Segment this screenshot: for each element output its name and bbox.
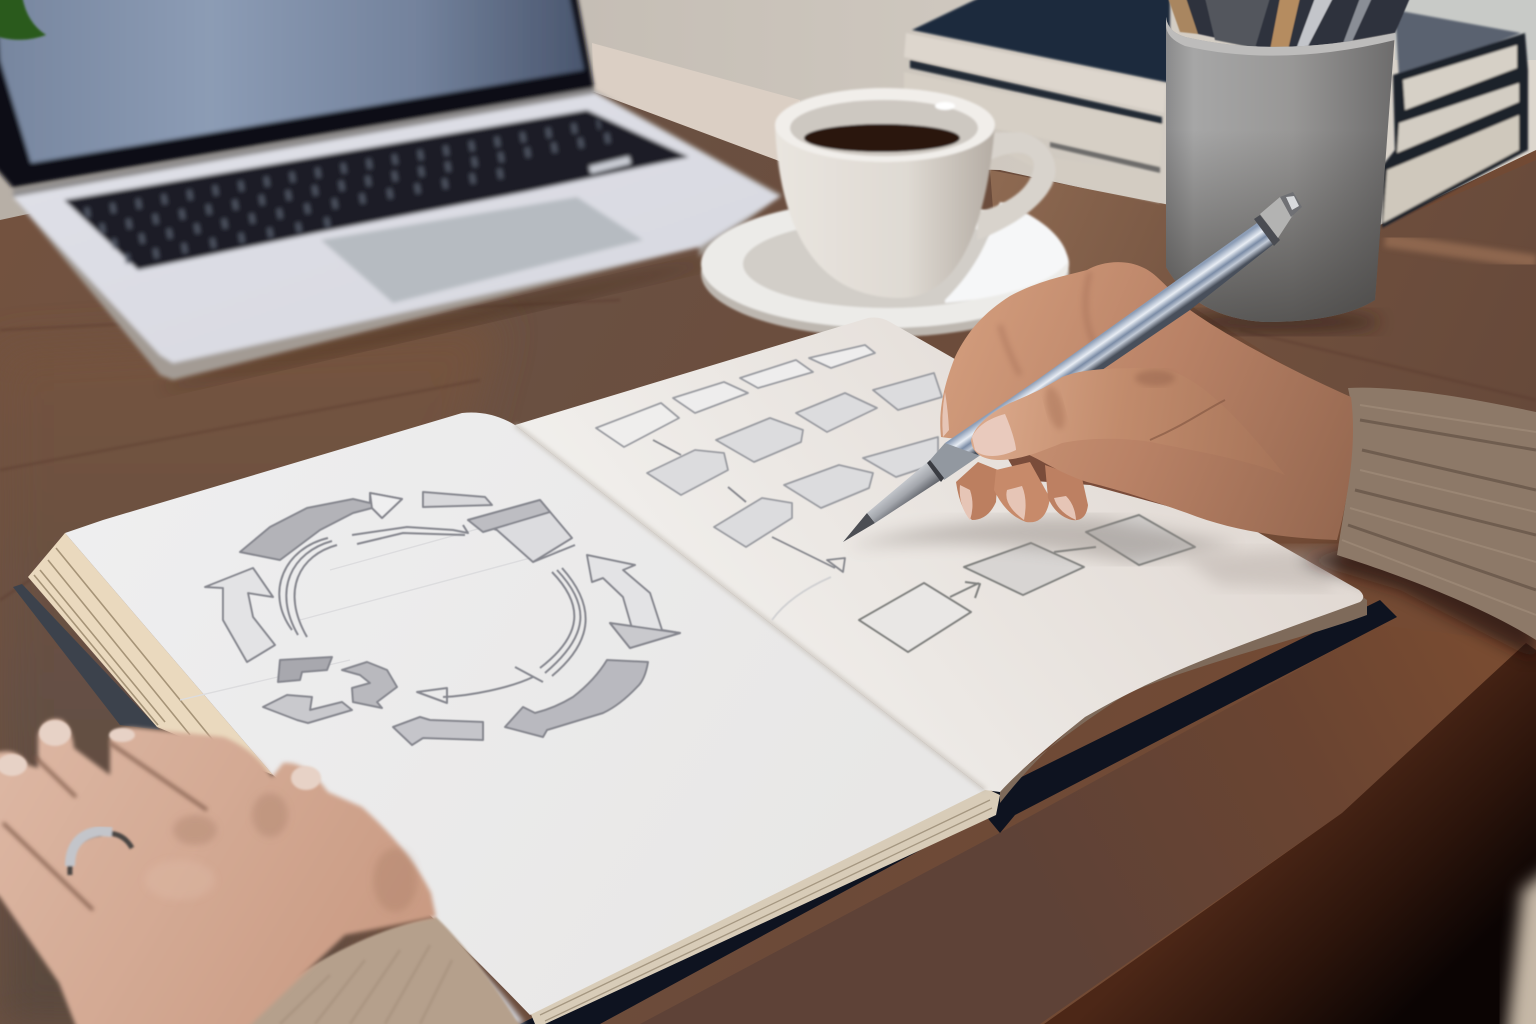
- background wall: [0, 0, 1536, 300]
- page block bottom: [530, 788, 1000, 1024]
- mechanical pen: [843, 192, 1302, 542]
- books stack left: [904, 0, 1170, 203]
- saucer: [701, 200, 1069, 337]
- page block right: [1000, 595, 1367, 803]
- curled fingers: [956, 440, 1200, 522]
- right hand: [940, 262, 1353, 540]
- thumbnail: [972, 414, 1016, 456]
- left page: [65, 412, 985, 1015]
- spine shadow: [515, 425, 985, 790]
- finger gaps and knuckle shading: [3, 743, 417, 912]
- right page: [515, 318, 1363, 792]
- hand back left: [0, 719, 436, 1024]
- laptop keyboard: [64, 110, 689, 270]
- pens in cup: [1168, 0, 1410, 53]
- ring: [70, 831, 132, 875]
- left hand: [0, 719, 525, 1024]
- thumb over pen: [971, 368, 1285, 475]
- notebook cover: [13, 584, 1397, 1024]
- desk front edge in shadow: [1044, 643, 1536, 1024]
- laptop screen: [0, 0, 594, 188]
- finger creases: [1000, 272, 1095, 375]
- hand back right: [940, 262, 1353, 540]
- page block left: [28, 533, 273, 775]
- plant leaf: [0, 0, 46, 40]
- sweater sleeve left: [225, 917, 525, 1024]
- fingernails right: [942, 392, 1076, 520]
- coffee cup: [775, 88, 1055, 298]
- right sweater sleeve: [1300, 388, 1536, 660]
- laptop base: [13, 90, 782, 380]
- sketch: cycle diagram of arrows: [205, 492, 680, 745]
- pencil shadow on page: [847, 517, 1240, 562]
- books stack right: [1382, 10, 1528, 228]
- sketch: lower flow boxes: [859, 515, 1195, 652]
- laptop trackpad: [321, 197, 643, 303]
- metal pen cup: [1166, 0, 1410, 334]
- notebook: [13, 318, 1397, 1024]
- fingernails left: [0, 720, 321, 790]
- sketch: flowchart rows of boxes: [596, 345, 942, 620]
- laptop: [0, 0, 782, 380]
